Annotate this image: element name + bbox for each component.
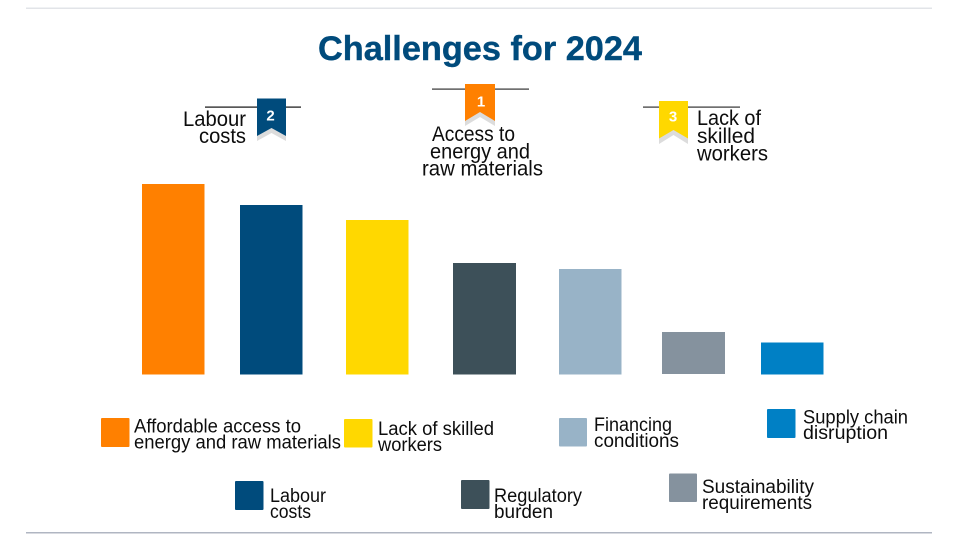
bar chart	[142, 184, 824, 374]
ribbon callout: labour costs, rank 2: Labour	[183, 108, 246, 131]
ribbon callout: lack of skilled workers, rank 3: Lack of	[697, 107, 761, 130]
legend item: supply chain disruption: disruption	[803, 423, 888, 444]
legend item: supply chain disruption: Supply chain	[803, 408, 908, 428]
ribbon callout: labour costs, rank 2: costs	[199, 125, 246, 148]
ribbon callout: labour costs, rank 2: 2	[266, 108, 275, 124]
legend item: regulatory burden: Regulatory	[494, 486, 582, 507]
ribbon callout: access to energy and raw materials, rank 1: 1	[477, 94, 485, 110]
ribbon callout: lack of skilled workers, rank 3: workers	[696, 142, 768, 166]
legend item: lack of skilled workers	[344, 419, 494, 456]
legend item: regulatory burden: burden	[494, 502, 553, 523]
ribbon callout: labour costs, rank 2	[183, 98, 301, 148]
ribbon callout: lack of skilled workers, rank 3	[643, 101, 768, 166]
legend item: financing conditions: conditions	[594, 431, 679, 452]
legend	[101, 408, 908, 523]
legend item: lack of skilled workers: Lack of skilled	[378, 419, 494, 440]
legend item: lack of skilled workers: workers	[377, 435, 442, 456]
legend item: labour costs	[235, 481, 327, 523]
legend item: affordable access to energy and raw materials: Affordable access to	[134, 416, 301, 438]
ribbon callout: access to energy and raw materials, rank 1: energy and	[430, 140, 530, 164]
ribbon callout: access to energy and raw materials, rank 1: raw materials	[422, 158, 543, 180]
legend item: labour costs: Labour	[270, 486, 327, 507]
ribbon callout: access to energy and raw materials, rank 1	[422, 84, 543, 180]
legend item: supply chain disruption	[767, 408, 908, 444]
title: Challenges for 2024	[318, 30, 642, 68]
legend item: sustainability requirements: requirements	[702, 493, 812, 514]
ribbon callout: access to energy and raw materials, rank 1: Access to	[432, 123, 515, 146]
legend item: labour costs: costs	[270, 502, 311, 523]
legend item: affordable access to energy and raw materials: energy and raw materials	[134, 432, 341, 454]
legend item: financing conditions	[559, 415, 679, 452]
legend item: regulatory burden	[461, 480, 582, 523]
ribbon callout: lack of skilled workers, rank 3: 3	[669, 108, 677, 126]
legend item: sustainability requirements: Sustainability	[702, 477, 814, 498]
legend item: affordable access to energy and raw materials	[101, 416, 341, 454]
ribbon callout: lack of skilled workers, rank 3: skilled	[697, 125, 755, 148]
legend item: financing conditions: Financing	[594, 415, 672, 436]
legend item: sustainability requirements	[669, 474, 814, 514]
